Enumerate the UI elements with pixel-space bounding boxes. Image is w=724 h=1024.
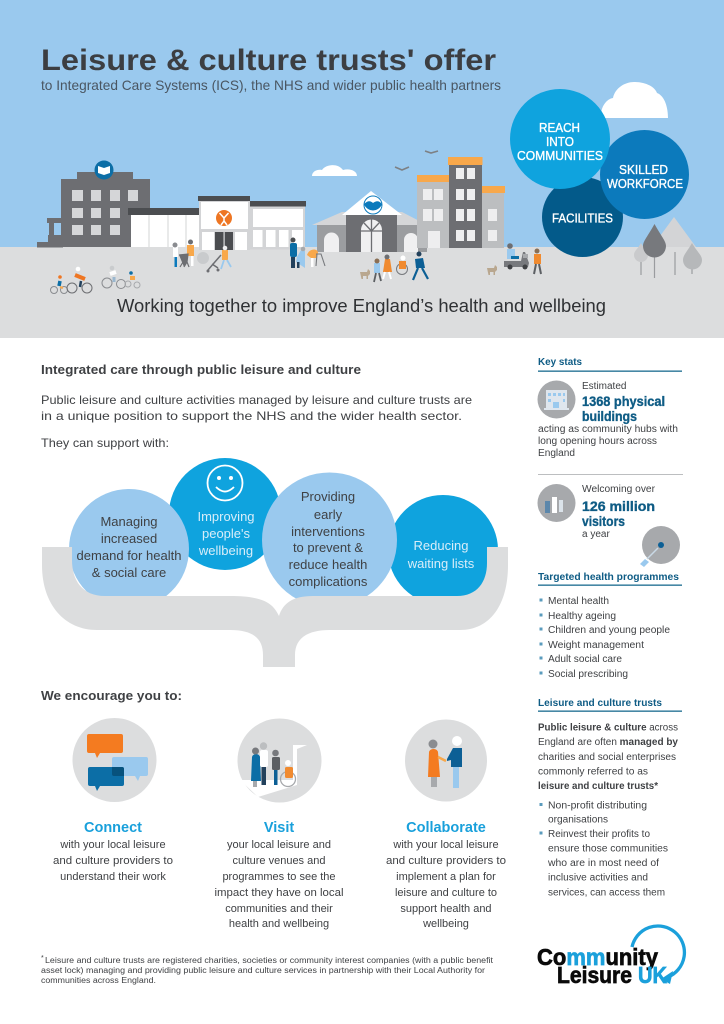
bullet list: trust features: Reinvest their profits to [548, 829, 650, 840]
text: managing demand [76, 514, 182, 580]
bullet list: trust features: Non-profit distributing [548, 800, 647, 812]
text: early interventions: complications [289, 574, 368, 589]
logo: Community Leisure UK: UK [638, 962, 667, 988]
footnote: asset lock) managing and providing public leisure and culture services in partnership with their Local Authority for [41, 966, 485, 975]
subtitle: to Integrated Care Systems (ICS), the NHS and wider public health partners [41, 77, 501, 93]
circle: facilities: FACILITIES [552, 210, 613, 226]
tagline: Working together to improve England’s health and wellbeing [117, 295, 606, 316]
footnote [41, 955, 494, 985]
bullet list: trust features: who are in most need of [547, 858, 659, 869]
footnote: communities across England. [41, 976, 156, 985]
stat: visitors: a year [582, 529, 610, 540]
stat: physical buildings: buildings [582, 408, 637, 424]
text: visit: impact they have on local [214, 887, 344, 899]
stat: visitors: visitors [582, 513, 625, 529]
header panel [0, 0, 724, 338]
text: description: charities and social enterprises [538, 752, 676, 763]
text: managing demand: & social care [92, 565, 166, 580]
building: library [37, 160, 150, 248]
building: museum [312, 191, 427, 252]
circle: improving wellbeing: people's [202, 526, 251, 541]
circle: facilities [542, 177, 623, 257]
text: managing demand: demand for health [76, 548, 182, 563]
stat: physical buildings: 1368 physical [582, 393, 665, 409]
circle: skilled workforce: WORKFORCE [607, 176, 683, 191]
icon: building [538, 380, 576, 418]
text: description: commonly referred to as [538, 766, 648, 778]
stat: physical buildings: Estimated [582, 381, 626, 392]
bullet list: programmes: Healthy ageing [548, 611, 616, 622]
bullet list: trust features: organisations [548, 814, 608, 826]
text: collaborate: leisure and culture to [395, 887, 497, 899]
text: visit [214, 820, 344, 930]
circle: reducing waiting lists: Reducing [414, 538, 468, 553]
text: visit: Visit [264, 820, 294, 836]
text: description: leisure and culture trusts* [538, 781, 658, 792]
circle: improving wellbeing: wellbeing [198, 543, 253, 558]
icon: location pin [640, 526, 680, 567]
intro text block: Public leisure and culture activities managed by leisure and culture trusts are [41, 393, 472, 407]
buildings: apartments [417, 157, 505, 248]
logo: Community Leisure UK: Community [537, 944, 658, 970]
text: visit: culture venues and [233, 855, 325, 867]
bullet list: trust features: ensure those communities [548, 844, 668, 854]
diagram: support bowl with circles [42, 458, 508, 667]
text: visit: health and wellbeing [229, 918, 329, 930]
icon: visitors [538, 484, 576, 522]
birds [395, 151, 438, 170]
mountain and trees [634, 217, 702, 278]
heading: targeted health programmes: Targeted health programmes [538, 572, 679, 583]
cloud: small [312, 165, 357, 176]
logo: Community Leisure UK [537, 926, 684, 988]
logo: Community Leisure UK: Leisure [557, 962, 632, 988]
text: collaborate: wellbeing [422, 918, 469, 930]
text: connect [53, 820, 173, 883]
bowl shape [42, 547, 508, 667]
stat: visitors: 126 million [582, 498, 655, 514]
text: description: Public leisure & culture across [538, 722, 678, 734]
people: mobility scooter and walker [504, 243, 541, 274]
bullet list: programmes: Weight management [548, 640, 644, 651]
cloud: large [601, 82, 668, 118]
text: early interventions: reduce health [289, 557, 367, 572]
heading: key stats: Key stats [538, 357, 582, 368]
sidebar: targeted health programmes [538, 572, 682, 680]
text: visit: your local leisure and [227, 839, 331, 851]
people: group with wheelchair [374, 252, 428, 282]
circle: reach into communities: COMMUNITIES [517, 148, 603, 163]
circle: skilled workforce [600, 130, 689, 219]
heading: integrated care: Integrated care through public leisure and culture [41, 363, 361, 377]
intro text block: in a unique position to support the NHS and the wider health sector. [41, 409, 462, 423]
circle: reach into communities [510, 89, 610, 189]
text: description: England are often managed by [538, 737, 678, 748]
bullet list: trust features: inclusive activities and [548, 872, 648, 884]
text: managing demand: increased [101, 531, 157, 546]
stat: physical buildings: long opening hours across [538, 436, 657, 447]
text: description [538, 722, 678, 792]
bullet list: trust features [540, 800, 668, 898]
stat: visitors: Welcoming over [582, 484, 656, 495]
icon: collaborate handshake [405, 720, 487, 802]
bullet list: programmes: Social prescribing [548, 669, 628, 680]
bullet list: programmes: Mental health [548, 596, 609, 607]
text: connect: with your local leisure [59, 839, 166, 851]
icon: visit people at ramp [238, 718, 322, 802]
circle: improving wellbeing [169, 458, 281, 570]
circle: managing demand [69, 489, 189, 609]
circle: improving wellbeing: Improving [197, 509, 255, 524]
text: managing demand: Managing [100, 514, 158, 529]
text: connect: and culture providers to [53, 855, 173, 867]
bullet list: programmes [540, 596, 670, 680]
circle: early interventions [262, 472, 397, 608]
text: early interventions: early [314, 507, 343, 522]
footnote: * [41, 955, 44, 962]
icon: dogs [360, 265, 497, 279]
people: group with pushchair [172, 240, 231, 272]
circle: reducing waiting lists: waiting lists [407, 556, 475, 571]
text: connect: Connect [84, 820, 142, 836]
text: collaborate: implement a plan for [396, 871, 496, 883]
text: early interventions: interventions [291, 524, 365, 539]
stat: physical buildings [538, 381, 678, 459]
circle: reach into communities: REACH [539, 120, 580, 135]
sidebar: leisure and culture trusts [538, 698, 682, 898]
bullet list: programmes: Adult social care [548, 654, 622, 665]
stat: physical buildings: England [538, 448, 575, 459]
text: collaborate: with your local leisure [392, 839, 499, 851]
text: connect: understand their work [60, 871, 166, 883]
stat: physical buildings: acting as community hubs with [538, 424, 678, 435]
heading: we encourage you to: We encourage you to: [41, 688, 182, 703]
text: visit: programmes to see the [222, 871, 336, 883]
intro text block [41, 363, 472, 450]
text: collaborate: support health and [400, 903, 492, 915]
text: collaborate: and culture providers to [386, 855, 506, 867]
circle: reducing waiting lists [388, 495, 498, 605]
text: collaborate [386, 820, 506, 930]
heading: leisure and culture trusts: Leisure and culture trusts [538, 698, 662, 709]
icon: connect speech bubbles [72, 718, 156, 802]
people: cyclists [50, 266, 140, 294]
text: visit: communities and their [225, 903, 333, 915]
text: collaborate: Collaborate [406, 820, 486, 836]
people: group with walking frame [290, 238, 325, 268]
bullet list: trust features: services, can access them [548, 888, 665, 898]
text: early interventions: Providing [301, 489, 355, 504]
intro text block: They can support with: [41, 436, 169, 450]
bullet list: programmes: Children and young people [548, 625, 670, 636]
title: Leisure & culture trusts' offer [41, 44, 496, 77]
building: leisure centre [128, 196, 306, 250]
text: early interventions [289, 489, 368, 589]
sidebar: key stats [538, 357, 683, 567]
circle: skilled workforce: SKILLED [619, 162, 668, 177]
text: early interventions: to prevent & [293, 540, 363, 555]
footnote: Leisure and culture trusts are registered charities, societies or community interest companies (with a public benefit [45, 956, 494, 965]
stat: visitors [582, 484, 656, 540]
circle: reach into communities: INTO [546, 134, 574, 149]
